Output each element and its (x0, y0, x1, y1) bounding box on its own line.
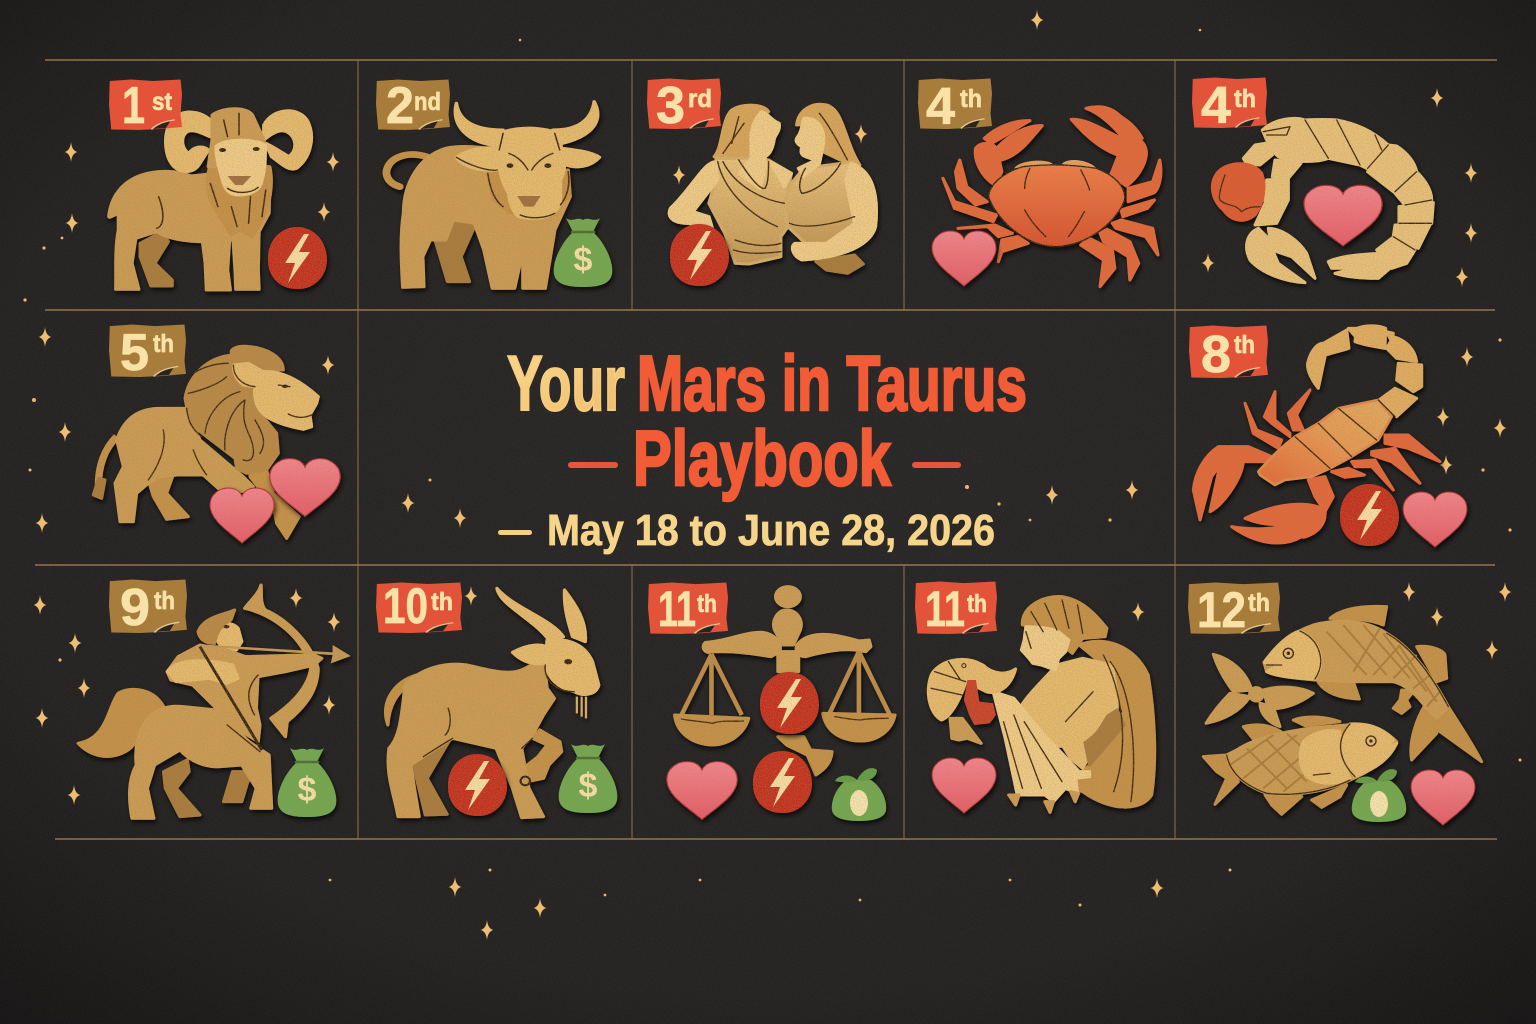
panel: 2nd house Taurus (376, 77, 612, 288)
icon: money bag pale (1352, 769, 1406, 822)
panel: 10th house Capricorn (376, 578, 617, 818)
panel: title (498, 339, 1027, 555)
rank badge: 10th: th (431, 588, 453, 616)
panel: 12th house Pisces (1188, 582, 1482, 825)
icon: heart small (210, 488, 274, 543)
icon: lightning energy (670, 224, 729, 286)
rank badge: 10th (376, 578, 462, 634)
icon: lightning energy (268, 227, 327, 289)
icon: money bag pale (832, 768, 886, 821)
water bearer figure (928, 597, 1155, 812)
icon: money bag: $ (298, 771, 317, 809)
icon: lightning energy (448, 754, 507, 816)
rank badge: 4th: th (960, 85, 982, 113)
rank badge: 8th: th (1234, 331, 1255, 359)
rank badge: 12th (1188, 582, 1280, 638)
panel: 9th house Sagittarius (78, 579, 351, 818)
icon: heart (667, 762, 737, 819)
icon: money bag: $ (574, 241, 593, 279)
rank badge: 4th: th (1234, 85, 1256, 113)
butterfly fish tail (1206, 654, 1313, 727)
rank badge: 11th (648, 581, 728, 637)
title dashes (568, 462, 961, 468)
lower fish (1203, 717, 1397, 814)
rank badge: 1st: st (152, 88, 173, 116)
icon: money bag (278, 748, 336, 817)
rank badge: 11th: th (967, 590, 987, 618)
icon: lightning energy (1340, 484, 1399, 546)
rank badge: 4th: 4 (926, 78, 955, 136)
icon: heart (1411, 770, 1475, 825)
title emphasis: Mars in Taurus (637, 339, 1027, 427)
rank badge: 11th: 11 (658, 581, 696, 637)
panel: 11th house Libra (648, 581, 895, 821)
ram figure (109, 109, 311, 290)
twins figure (669, 104, 876, 273)
rank badge: 8th: 8 (1201, 326, 1231, 384)
rank badge: 11th: th (697, 590, 717, 618)
icon: lightning energy lower (753, 751, 812, 813)
icon: heart (932, 231, 996, 286)
crab figure (943, 107, 1161, 287)
rank badge: 4th (918, 78, 992, 136)
upper fish (1264, 606, 1482, 762)
rank badge: 8th (1189, 326, 1268, 384)
icon: heart (1304, 185, 1382, 246)
archer figure (78, 585, 351, 818)
rank badge: 1st (109, 77, 182, 135)
panel: 8th house Scorpio (1189, 326, 1467, 547)
panel: 11th house Aquarius (915, 581, 1155, 813)
grid lines (35, 60, 1497, 839)
rank badge: 9th: th (154, 587, 175, 615)
goat figure (386, 588, 599, 818)
icon: money bag pale: $ (851, 788, 867, 819)
rank badge: 11th: 11 (925, 581, 965, 637)
scales figure (675, 587, 895, 775)
title line 2: Playbook (633, 414, 891, 502)
scorpion-lobster figure (1212, 118, 1433, 283)
icon: money bag pale: $ (1371, 789, 1387, 820)
icon: heart large (270, 459, 340, 516)
panel: 4th house Cancer (918, 78, 1161, 287)
rank badge: 5th: th (153, 330, 174, 358)
scorpion figure (1193, 326, 1440, 543)
icon: heart (932, 758, 996, 813)
icon: heart (1403, 492, 1467, 547)
rank badge: 12th: 12 (1197, 582, 1246, 638)
rank badge: 2nd (376, 77, 450, 135)
icon: money bag (559, 744, 617, 813)
bull figure (386, 102, 600, 288)
rank badge: 3rd (647, 77, 721, 135)
rank badge: 11th (915, 581, 997, 637)
rank badge: 9th: 9 (120, 579, 150, 637)
panel: 1st house Aries (109, 77, 327, 290)
title word Your: Your (507, 339, 625, 427)
rank badge: 4th: 4 (1201, 77, 1231, 135)
icon: money bag: $ (579, 767, 598, 805)
rank badge: 12th: th (1248, 589, 1270, 617)
rank badge: 1st: 1 (122, 77, 145, 135)
rank badge: 5th (109, 324, 186, 382)
panel: 3rd house Gemini (647, 77, 876, 286)
rank badge: 3rd: rd (688, 85, 712, 113)
rank badge: 3rd: 3 (656, 77, 685, 135)
lion figure (93, 346, 318, 538)
rank badge: 2nd: nd (414, 88, 441, 116)
date range: May 18 to June 28, 2026 (547, 506, 995, 555)
rank badge: 10th: 10 (383, 578, 428, 634)
rank badge: 9th (109, 579, 187, 637)
icon: money bag (554, 218, 612, 287)
rank badge: 4th (1192, 77, 1267, 135)
icon: lightning energy upper (760, 672, 819, 734)
rank badge: 5th: 5 (120, 324, 149, 382)
rank badge: 2nd: 2 (386, 77, 414, 135)
panel: 5th house Leo (93, 324, 340, 543)
panel: 4th house Scorpio shrimp (1192, 77, 1433, 283)
